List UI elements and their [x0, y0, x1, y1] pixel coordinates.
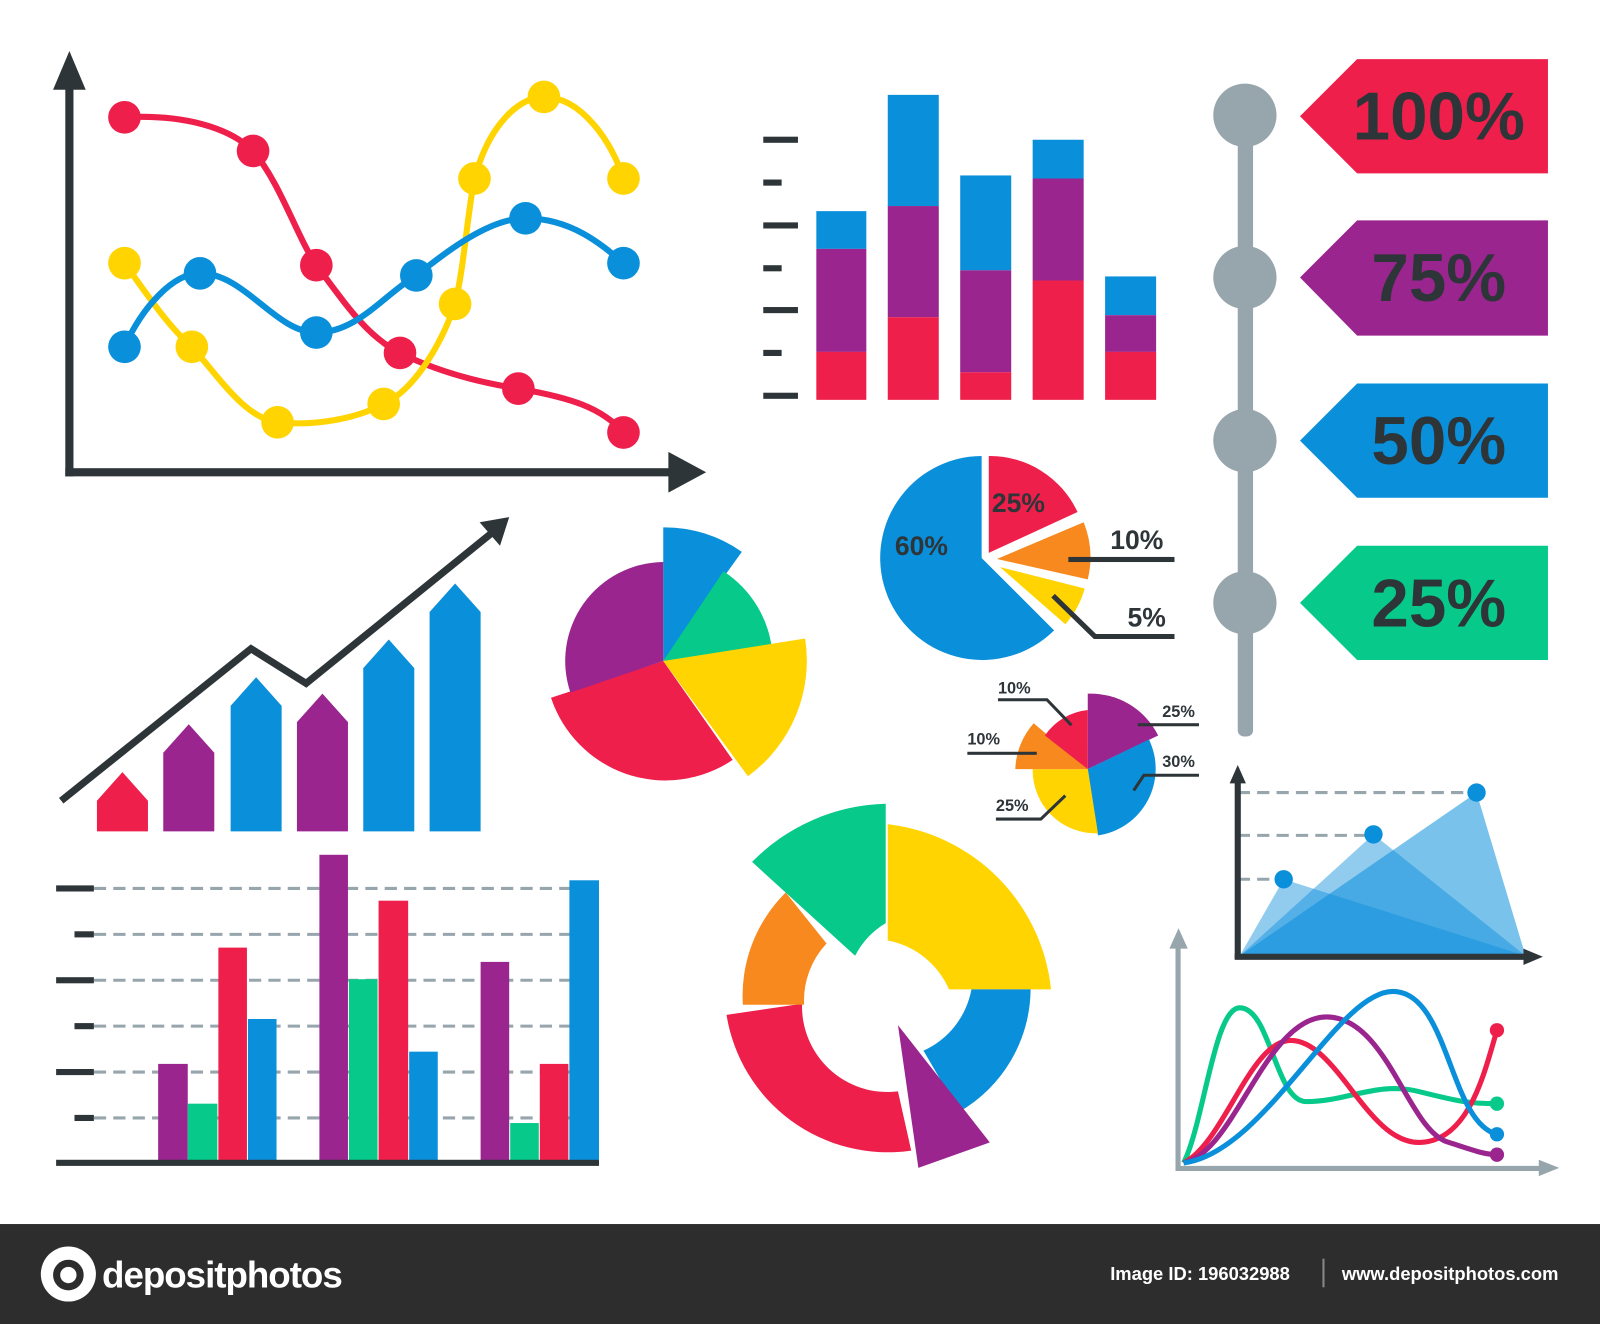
footer bar: depositphotos [102, 1254, 342, 1295]
grouped bar chart: bottom left [56, 855, 599, 1166]
bars [816, 95, 1156, 400]
tag 25% [1300, 546, 1548, 660]
timeline nodes [1213, 84, 1277, 634]
pie chart with labels: 5% [1128, 602, 1166, 632]
red 25% [989, 456, 1078, 553]
stacked bar chart: top middle [763, 95, 1156, 400]
footer bar: Image ID: 196032988 [1110, 1263, 1290, 1284]
trend arrow [61, 517, 509, 801]
pie chart with labels: 25% [992, 488, 1045, 518]
pie chart with labels: 10% [1110, 525, 1163, 555]
bars [158, 855, 599, 1163]
yellow series [108, 81, 640, 439]
area chart: bottom right [1230, 765, 1543, 965]
red series [108, 101, 640, 449]
footer bar [0, 1224, 1600, 1324]
small pie chart with labels: 10% [967, 731, 1000, 749]
multi-curve chart: bottom right [1169, 928, 1559, 1176]
blue 60% [880, 456, 1054, 660]
blue series [108, 202, 640, 363]
small pie chart with labels: 10% [998, 680, 1031, 698]
small pie chart with labels: 30% [1162, 753, 1195, 771]
grid [94, 888, 571, 1118]
tag 75%: 75% [1371, 241, 1506, 316]
small pie chart with labels: 25% [1162, 703, 1195, 721]
small pie chart with labels [967, 680, 1199, 835]
orange 10% [997, 522, 1090, 579]
tag 100%: 100% [1353, 80, 1525, 155]
footer bar: www.depositphotos.com [1341, 1263, 1558, 1284]
line chart: top left [53, 51, 706, 493]
logo icon [41, 1246, 96, 1302]
tag 100% [1300, 59, 1548, 173]
tag 25%: 25% [1371, 566, 1506, 641]
arrow bar chart with trend line [61, 517, 509, 831]
pie chart with labels [880, 456, 1174, 660]
tag 50% [1300, 384, 1548, 498]
tag 50%: 50% [1371, 404, 1506, 479]
yellow 5% [1000, 567, 1085, 624]
donut chart [727, 804, 1051, 1168]
labels: 60% [895, 531, 948, 561]
timeline line [1238, 112, 1253, 736]
exploded pie chart [551, 527, 807, 780]
ticks [763, 137, 798, 399]
small pie chart with labels: 25% [996, 797, 1029, 815]
tag 75% [1300, 220, 1548, 336]
timeline with percentage tags [1213, 59, 1548, 736]
axes [53, 51, 706, 493]
